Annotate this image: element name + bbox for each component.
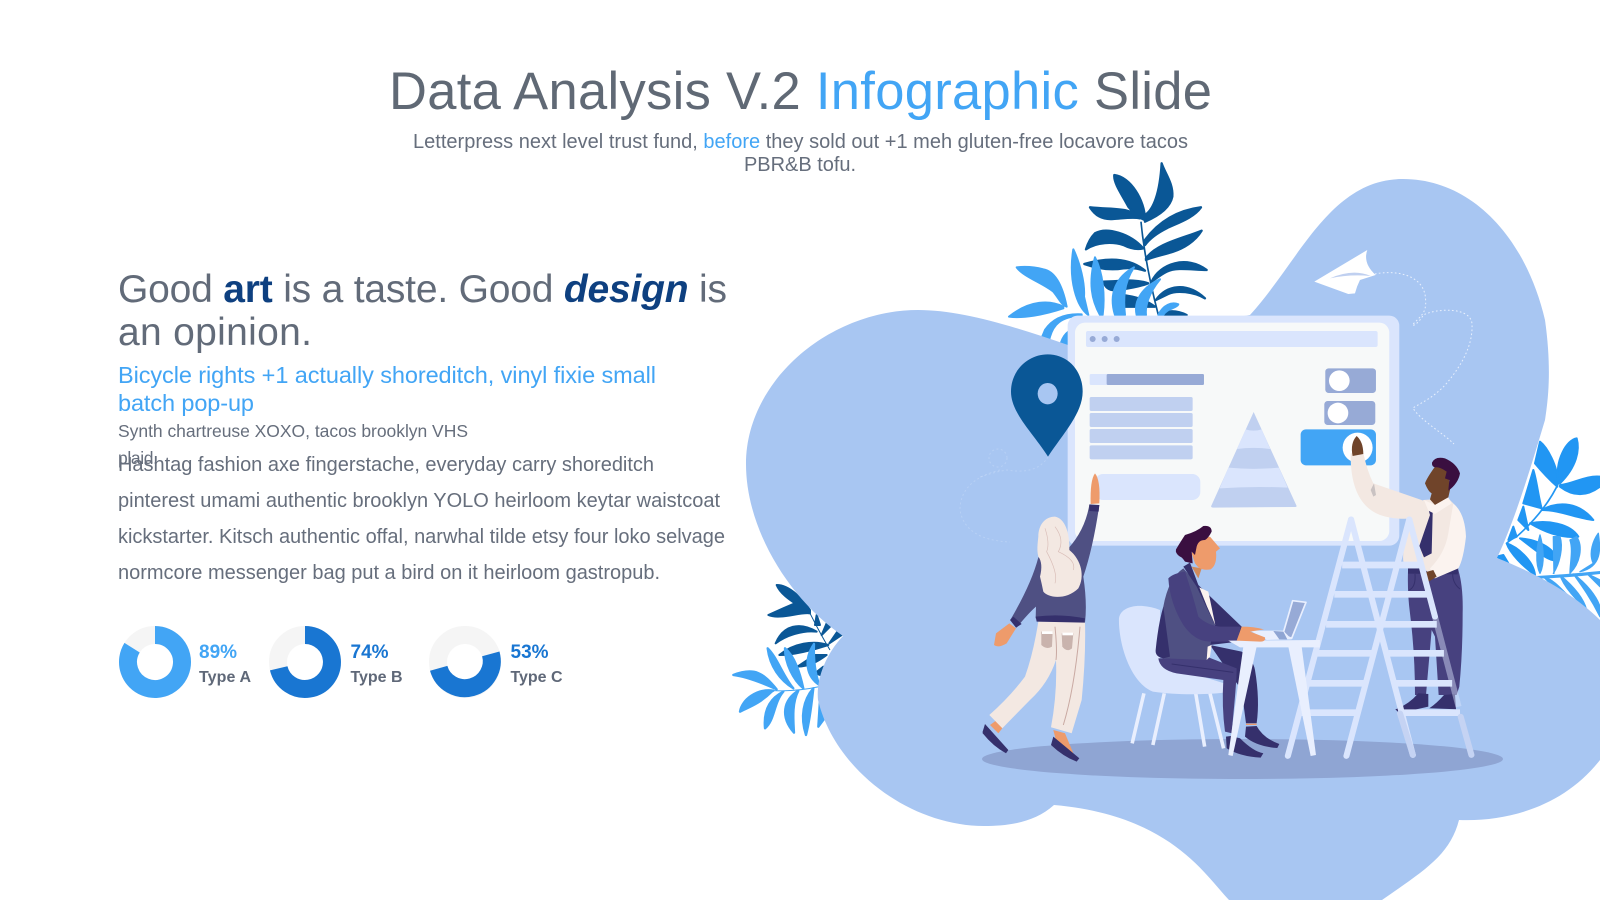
subtitle: Letterpress next level trust fund, before they sold out +1 meh gluten-free locavore tacos <box>413 131 1188 153</box>
heading <box>118 268 727 354</box>
plant: right, behind blob <box>1497 438 1600 617</box>
ladder <box>1288 519 1471 756</box>
title: Data Analysis V.2 Infographic Slide <box>389 62 1212 121</box>
desk with laptop <box>1228 601 1320 756</box>
desk chair <box>1119 606 1224 748</box>
donut: Type C <box>438 635 563 689</box>
man on ladder <box>1351 453 1466 713</box>
dashed trail: near pin <box>960 449 1048 542</box>
donut: Type A <box>128 635 251 689</box>
body paragraph: kickstarter. Kitsch authentic offal, narwhal tilde etsy four loko selvage <box>118 526 725 548</box>
body paragraph: Hashtag fashion axe fingerstache, everyday carry shoreditch <box>118 454 654 476</box>
finger on toggle <box>1352 436 1363 456</box>
seated man <box>1156 526 1279 758</box>
window frame <box>1068 316 1399 546</box>
body paragraph: normcore messenger bag put a bird on it heirloom gastropub. <box>118 562 660 584</box>
donut: Type B: Type B <box>350 669 402 686</box>
plant: top, behind window <box>1009 163 1207 363</box>
donut: Type C: Type C <box>510 669 563 686</box>
small text: plaid. <box>118 448 158 468</box>
plant: bottom left, behind blob <box>733 585 842 735</box>
dashed flight trail: paper plane <box>1375 273 1472 444</box>
browser bar <box>1086 331 1378 347</box>
pyramid chart <box>1211 412 1297 508</box>
window content <box>1075 323 1389 541</box>
background blob <box>746 179 1600 900</box>
blue subheading: batch pop-up <box>118 390 254 416</box>
heading: Good art is a taste. Good design is <box>118 268 727 311</box>
ground shadow <box>982 739 1503 779</box>
donut: Type B <box>278 635 402 689</box>
small text: Synth chartreuse XOXO, tacos brooklyn VHS <box>118 421 468 441</box>
paper plane icon <box>1314 250 1376 294</box>
window mockup <box>1011 316 1399 546</box>
donut: Type A: Type A <box>199 669 251 686</box>
list block <box>1090 374 1204 500</box>
toggle switches <box>1301 368 1376 465</box>
standing woman <box>983 473 1100 762</box>
donut: Type A: 89% <box>199 642 237 663</box>
subtitle <box>413 131 1188 176</box>
subtitle: PBR&B tofu. <box>744 154 856 176</box>
donut: Type B: 74% <box>350 642 389 663</box>
donut: Type C: 53% <box>510 642 549 663</box>
small text <box>118 421 468 468</box>
blue subheading <box>118 362 656 416</box>
body paragraph: pinterest umami authentic brooklyn YOLO heirloom keytar waistcoat <box>118 490 720 512</box>
blue subheading: Bicycle rights +1 actually shoreditch, vinyl fixie small <box>118 362 656 388</box>
body paragraph <box>118 454 725 584</box>
heading: an opinion. <box>118 311 312 354</box>
map pin icon <box>1011 354 1083 457</box>
